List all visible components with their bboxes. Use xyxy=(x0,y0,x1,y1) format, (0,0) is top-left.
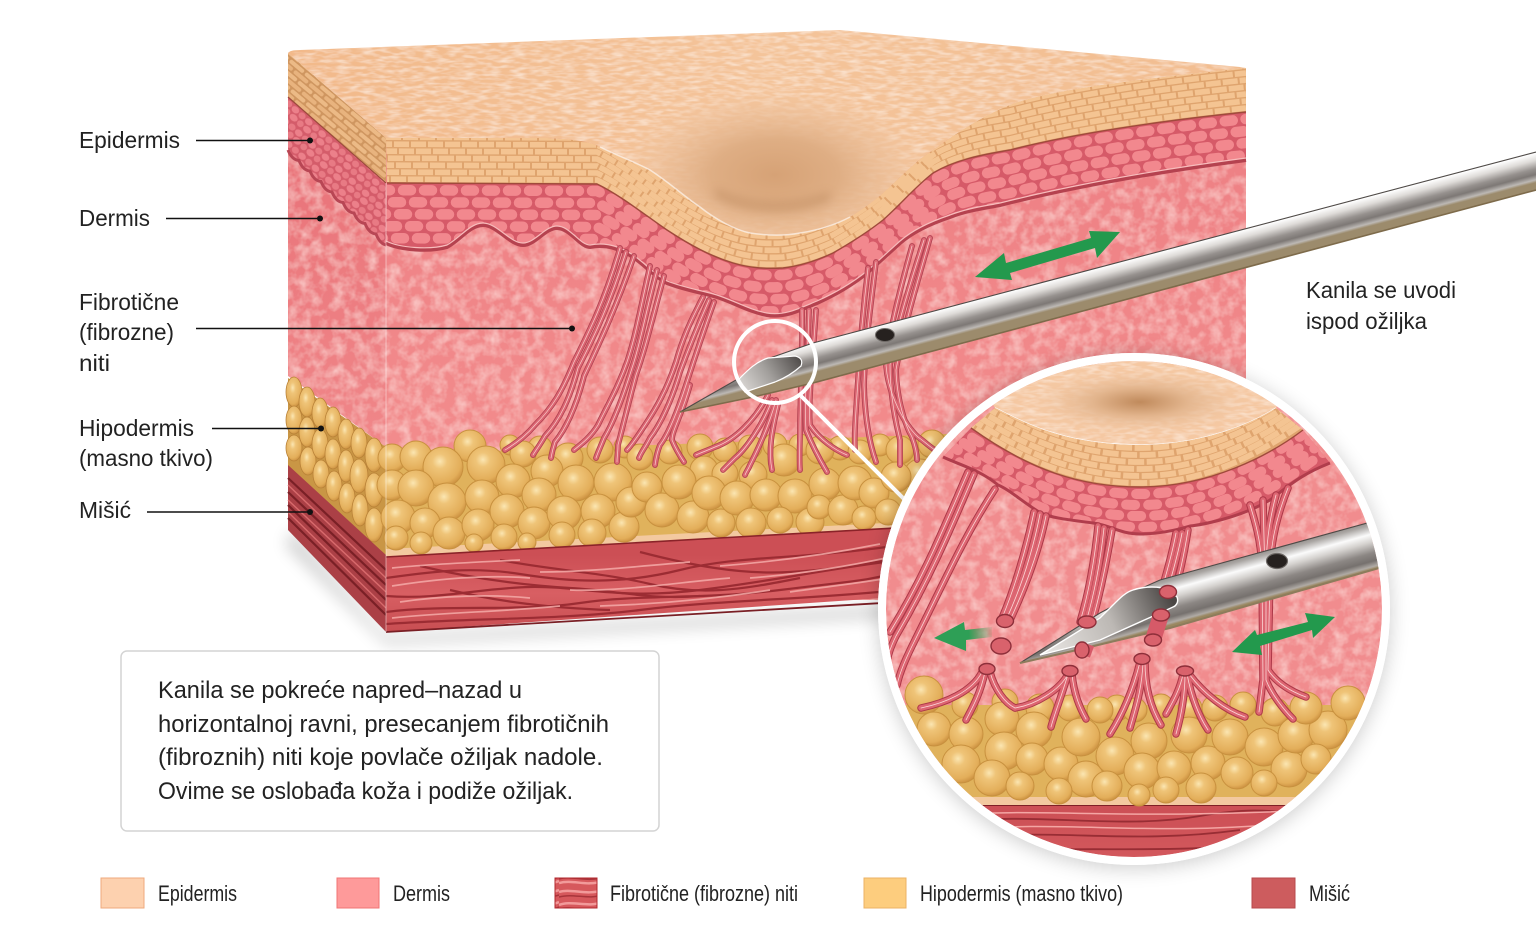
legend: Hypodermis xyxy=(864,878,1123,908)
zoom epidermis band xyxy=(972,408,1303,486)
front muscle layer xyxy=(386,522,1000,632)
callout description: Ovime se oslobađa koža i podiže ožiljak. xyxy=(158,778,573,805)
legend: Muscle: Mišić xyxy=(1309,881,1350,906)
cannula caption xyxy=(1306,277,1456,334)
label: Fibrotic fibers: niti xyxy=(79,350,110,376)
zoom muscle xyxy=(981,804,1287,857)
cannula caption: Kanila se uvodi xyxy=(1306,277,1456,303)
left side face xyxy=(288,53,386,447)
legend: Epidermis xyxy=(101,878,237,908)
label: Dermis xyxy=(79,205,323,231)
label: Epidermis: Epidermis xyxy=(79,127,180,153)
top skin surface with scar dimple xyxy=(288,30,1246,235)
callout description: (fibroznih) niti koje povlače ožiljak nadole. xyxy=(158,744,603,771)
label: Hypodermis: Hipodermis xyxy=(79,415,194,441)
zoom dermis xyxy=(880,355,1390,865)
label: Epidermis xyxy=(79,127,313,153)
cannula side hole xyxy=(876,328,894,342)
zoom fat cells xyxy=(880,676,1390,806)
zoom cell band xyxy=(942,428,1330,536)
front dermis xyxy=(386,138,1246,600)
legend: Muscle xyxy=(1252,878,1350,908)
zoom circle xyxy=(878,341,1400,870)
label: Fibrotic fibers: Fibrotične xyxy=(79,289,179,315)
callout description xyxy=(121,651,659,831)
callout description: Kanila se pokreće napred–nazad u xyxy=(158,677,522,704)
connector line to zoom circle xyxy=(801,396,908,503)
cannula xyxy=(680,152,1536,412)
label: Hypodermis: (masno tkivo) xyxy=(79,445,213,471)
front hypodermis fat cells xyxy=(377,430,1000,556)
side muscle xyxy=(288,465,386,632)
left pull arrow xyxy=(934,622,992,651)
label: Muscle: Mišić xyxy=(79,497,131,523)
cannula bevel opening xyxy=(738,356,802,392)
fibrotic fibers xyxy=(505,238,935,475)
front epidermis band xyxy=(340,66,1246,268)
zoom cannula xyxy=(1020,522,1379,664)
legend: Epidermis: Epidermis xyxy=(158,881,237,906)
short cut fiber piece under cannula xyxy=(1081,648,1092,652)
legend: Fibrotic fibers xyxy=(555,878,798,908)
zoom circle shadow xyxy=(878,356,1390,868)
zoom cannula side hole xyxy=(1266,554,1288,568)
legend: Hypodermis: Hipodermis (masno tkivo) xyxy=(920,881,1123,906)
cut fiber ends xyxy=(979,586,1194,676)
label: Hypodermis xyxy=(79,415,324,471)
cut fiber bundle in cannula xyxy=(1153,615,1161,640)
label: Muscle xyxy=(79,497,313,523)
label: Fibrotic fibers: (fibrozne) xyxy=(79,319,174,345)
small magnifier ring xyxy=(734,321,816,403)
side fat layer xyxy=(286,377,386,556)
double green arrow on block xyxy=(975,231,1120,280)
zoom double arrow xyxy=(1232,613,1335,655)
label: Dermis: Dermis xyxy=(79,205,150,231)
skin cross-section block xyxy=(286,30,1246,632)
callout description: horizontalnoj ravni, presecanjem fibrotičnih xyxy=(158,711,609,738)
block drop shadow xyxy=(286,530,900,644)
legend: Dermis xyxy=(337,878,450,908)
legend: Dermis: Dermis xyxy=(393,881,450,906)
label: Fibrotic fibers xyxy=(79,289,575,376)
zoom top skin xyxy=(993,361,1277,445)
cannula caption: ispod ožiljka xyxy=(1306,308,1427,334)
front epidermal cell band with wavy edge xyxy=(340,112,1246,323)
legend: Fibrotic fibers: Fibrotične (fibrozne) niti xyxy=(610,881,798,906)
zoom fibers xyxy=(887,472,1306,734)
zoom bevel opening xyxy=(1040,587,1178,655)
legend xyxy=(101,878,1350,908)
